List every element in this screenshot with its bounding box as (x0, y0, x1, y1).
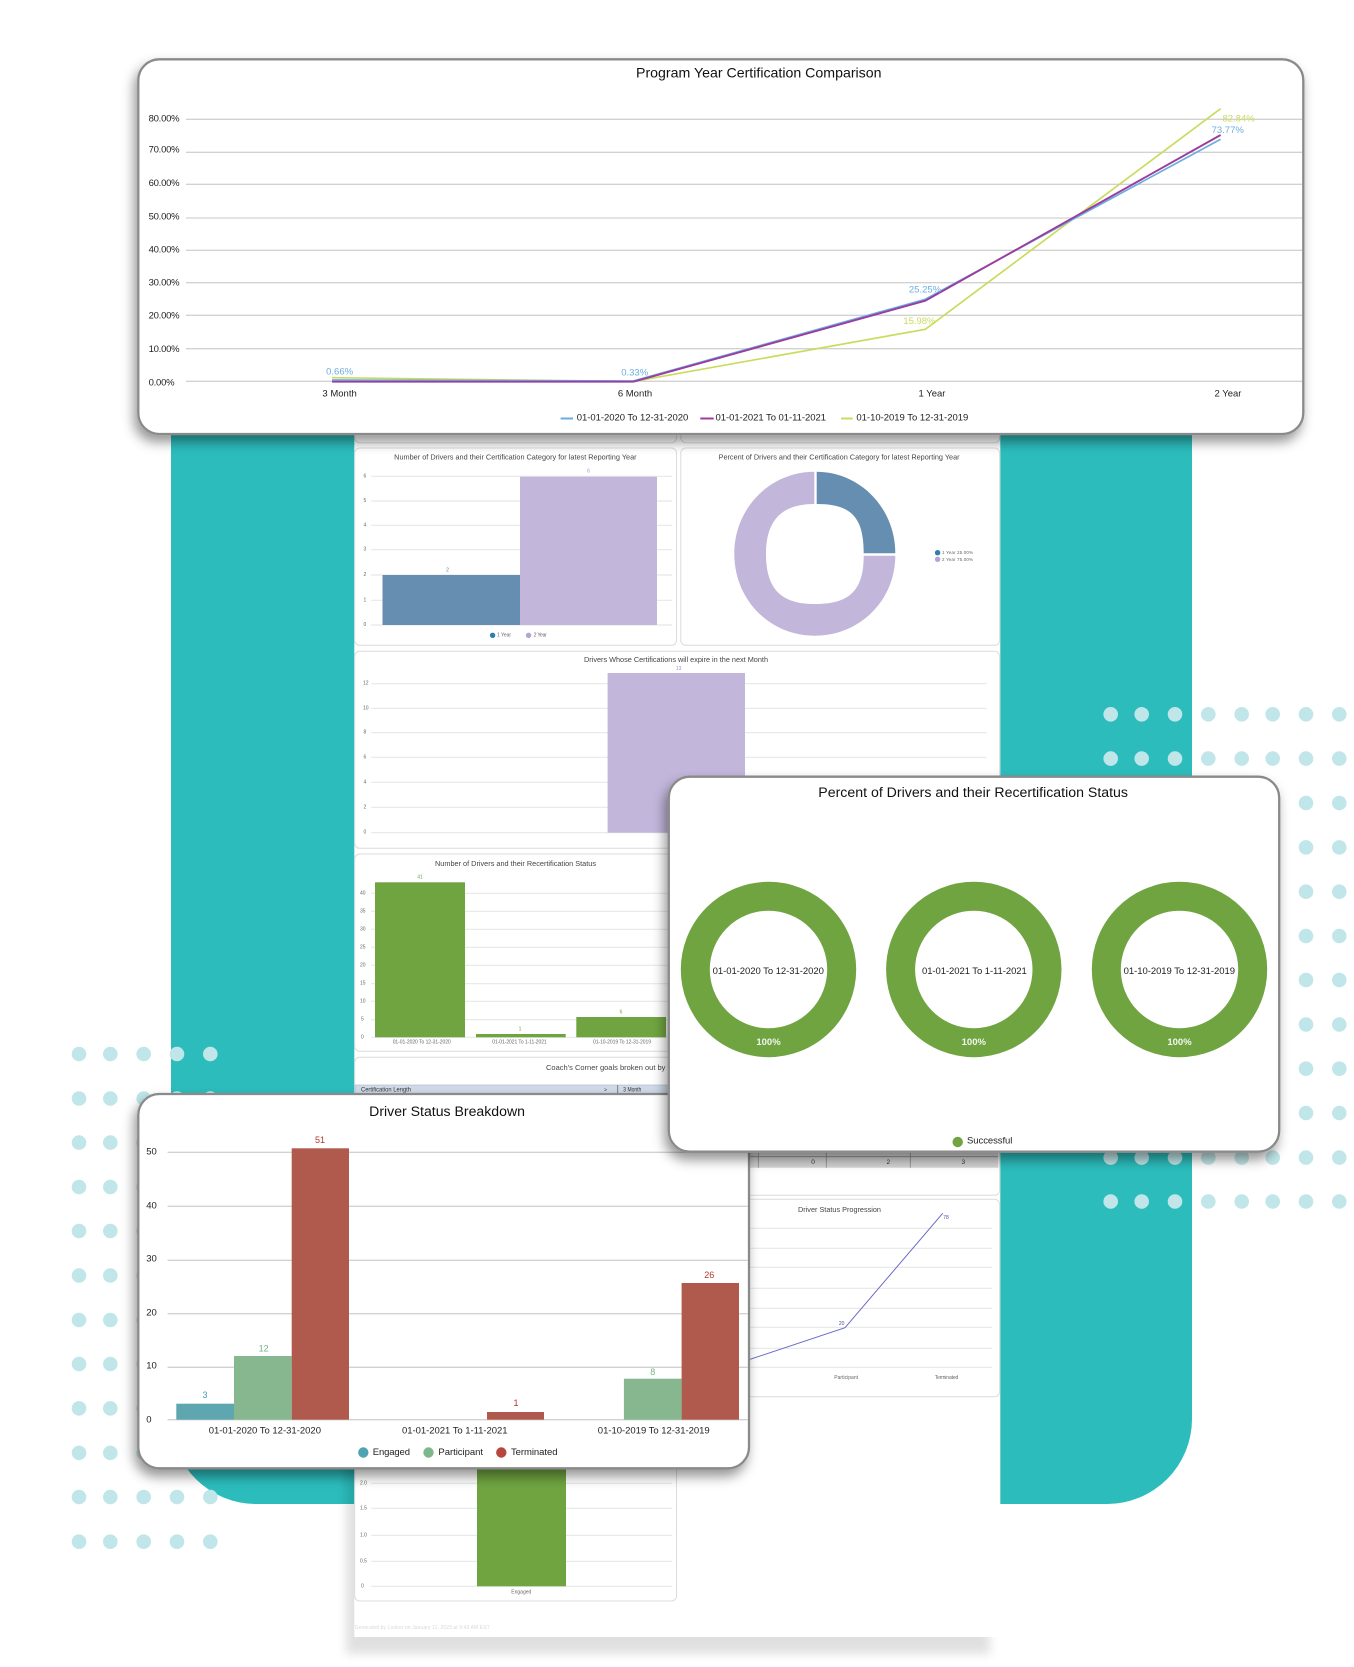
line chart (695, 1213, 992, 1381)
bar chart: 40 (360, 890, 366, 896)
bar chart: 4 (364, 779, 366, 785)
legend (561, 412, 968, 424)
card: number of drivers by certification category (355, 448, 676, 645)
data labels: 1 (513, 1398, 519, 1408)
card title: Drivers Whose Certifications will expire in the next Month (584, 657, 768, 664)
donut legend: 1 Year 25.00% (942, 550, 973, 555)
card title: Percent of Drivers and their Certification Category for latest Reporting Year (719, 454, 960, 462)
legend: 01-10-2019 To 12-31-2019 (856, 412, 968, 424)
dot grid: right (1103, 707, 1347, 1209)
bar chart: Engaged (511, 1589, 532, 1595)
bar chart: 13 (676, 666, 682, 672)
y axis labels: 60.00% (149, 178, 180, 189)
bar chart: 1 (364, 597, 366, 603)
bar chart: 0 (364, 830, 366, 836)
bar chart: 15 (360, 981, 366, 987)
bar chart: 01-10-2019 To 12-31-2019 (593, 1039, 651, 1045)
table header (355, 1085, 999, 1095)
data labels: 25.25% (909, 284, 942, 296)
legend: 01-01-2021 To 01-11-2021 (716, 412, 826, 424)
data labels: 0.66% (326, 366, 354, 378)
bar chart: 6 (587, 469, 590, 475)
bar chart: 8 (364, 730, 366, 736)
bar chart: 3 (364, 547, 366, 553)
card: number of drivers recertification status (355, 854, 1000, 1051)
card: percent of drivers by certification category (681, 448, 1000, 645)
y axis labels (146, 1146, 157, 1426)
card: certifications expiring next month (355, 651, 1000, 848)
bar chart (360, 875, 986, 1045)
table total row: 0 (811, 1159, 815, 1166)
y axis labels (149, 114, 180, 388)
donut: 2020: 01-01-2020 To 12-31-2020 (713, 966, 824, 977)
bar chart: 2 (364, 572, 366, 578)
legend: Engaged (373, 1447, 410, 1458)
card title: Driver Status Progression (798, 1207, 881, 1214)
bar chart (363, 666, 987, 836)
card title: Number of Drivers and their Recertification Status (435, 861, 597, 868)
x axis labels: 2 Year (1215, 388, 1241, 400)
bar chart: 0 (361, 1583, 364, 1589)
line chart: Participant (834, 1375, 859, 1381)
bar chart: 01-01-2020 To 12-31-2020 (393, 1039, 451, 1045)
data labels: 12 (259, 1344, 269, 1354)
x axis labels: 1 Year (919, 388, 945, 400)
y axis labels: 40.00% (149, 244, 180, 256)
bar chart (360, 1400, 672, 1595)
bar chart: 20 (360, 962, 366, 968)
donut legend (935, 550, 973, 562)
x axis labels (209, 1425, 710, 1436)
legend: Successful (967, 1136, 1012, 1146)
bar chart: 41 (417, 875, 423, 881)
card title: Number of Drivers and their Certification Category for latest Reporting Year (394, 454, 637, 462)
x axis labels: 3 Month (322, 388, 357, 400)
data labels: 15.98% (903, 316, 936, 327)
bar chart: 30 (360, 926, 366, 932)
y axis labels: 40 (146, 1200, 157, 1212)
line chart: Terminated (935, 1375, 959, 1381)
x axis labels: 6 Month (618, 388, 652, 400)
data labels: 26 (704, 1270, 714, 1280)
top cards, partly hidden (355, 380, 1000, 443)
table total row: 3 (961, 1159, 965, 1166)
bar chart: 4 (364, 522, 366, 528)
legend: Terminated (511, 1447, 558, 1458)
data labels: 0.33% (621, 368, 649, 378)
bar chart: 01-01-2021 To 1-11-2021 (492, 1039, 547, 1045)
footer note: Generated by Looker on January 11, 2023 at 9:43 AM EST (355, 1625, 490, 1631)
donut legend: 2 Year 75.00% (942, 557, 973, 562)
y axis labels: 70.00% (149, 144, 180, 156)
y axis labels: 10.00% (149, 344, 180, 355)
bar chart: 6 (364, 473, 366, 479)
legend: 2 Year (534, 632, 547, 638)
bar chart: 25 (360, 944, 366, 950)
data labels: 8 (650, 1367, 655, 1377)
legend: 01-01-2020 To 12-31-2020 (577, 412, 688, 424)
table total row: 2 (886, 1159, 890, 1166)
donut: 2021: 100% (962, 1037, 986, 1048)
table header: Certification Length (361, 1088, 411, 1094)
data labels (202, 1135, 714, 1408)
bar chart: 2 (364, 804, 366, 810)
y axis labels: 30.00% (149, 278, 180, 288)
y axis labels: 30 (146, 1254, 157, 1264)
bar chart: 0.5 (360, 1558, 367, 1564)
y axis labels: 80.00% (149, 114, 180, 124)
donut: 2021 (901, 896, 1047, 1048)
y axis labels: 20 (146, 1308, 157, 1318)
table total row (700, 1152, 998, 1168)
y axis labels: 50 (146, 1146, 157, 1158)
bar chart: 2 (446, 568, 449, 574)
bar chart: 1.5 (360, 1505, 367, 1511)
data labels: 3 (202, 1390, 208, 1400)
dot grid: left (72, 1047, 218, 1549)
bar chart (168, 1148, 748, 1420)
y axis labels: 0.00% (149, 378, 175, 388)
card: coach's corner goals table (355, 1057, 1000, 1195)
bar chart: 12 (363, 681, 369, 687)
title: Program Year Certification Comparison (636, 64, 882, 80)
donut: 2020: 100% (756, 1037, 781, 1048)
bar chart: 6 (620, 1010, 623, 1016)
bar chart: 1 (519, 1027, 522, 1033)
bar chart: 2.0 (360, 1480, 367, 1486)
panel: driver status breakdown (138, 1094, 749, 1468)
line chart: 78 (943, 1215, 949, 1221)
donut: 2019 (1106, 896, 1253, 1048)
donut: 2021: 01-01-2021 To 1-11-2021 (922, 966, 1027, 977)
y axis labels: 0 (146, 1414, 151, 1426)
y axis labels: 10 (146, 1360, 157, 1372)
data labels: 73.77% (1212, 125, 1244, 136)
x axis labels: 01-10-2019 To 12-31-2019 (598, 1425, 710, 1436)
data labels (326, 114, 1255, 378)
x axis labels (322, 388, 1241, 400)
table header: 3 Month (623, 1088, 641, 1094)
bar chart: 5 (361, 1017, 364, 1023)
table header: > (604, 1088, 607, 1094)
panel: program year certification comparison (138, 59, 1303, 434)
legend: 1 Year (497, 632, 511, 638)
legend (358, 1447, 558, 1458)
teal background shape (171, 100, 1192, 1504)
legend: Participant (438, 1447, 483, 1458)
report page shadow (346, 1400, 990, 1654)
y axis labels: 20.00% (149, 310, 180, 322)
y axis labels: 50.00% (149, 212, 180, 222)
card title: Coach's Corner goals broken out by Certification Length (546, 1063, 732, 1072)
line chart: 20 (839, 1321, 845, 1327)
line chart (186, 109, 1302, 382)
title: Percent of Drivers and their Recertification Status (818, 785, 1128, 800)
x axis labels: 01-01-2021 To 1-11-2021 (402, 1425, 508, 1436)
bar chart: 10 (363, 705, 369, 711)
legend (490, 632, 547, 638)
card: engaged bar chart (355, 1199, 676, 1601)
donut: 2020 (695, 896, 842, 1048)
panel: percent of drivers recertification status (669, 777, 1279, 1152)
bar chart: 5 (364, 498, 366, 504)
bar chart: 10 (360, 998, 366, 1004)
report page (354, 300, 1000, 1637)
donut chart (734, 472, 895, 636)
donut: 2019: 01-10-2019 To 12-31-2019 (1124, 966, 1235, 977)
x axis labels: 01-01-2020 To 12-31-2020 (209, 1425, 321, 1436)
bar chart: 35 (360, 908, 366, 914)
bar chart: 6 (364, 754, 366, 760)
bar chart: 0 (364, 622, 366, 628)
data labels: 82.84% (1222, 114, 1255, 124)
bar chart (364, 469, 672, 628)
donut: 2019: 100% (1167, 1037, 1192, 1048)
title: Driver Status Breakdown (369, 1104, 525, 1119)
data labels: 51 (315, 1135, 325, 1145)
bar chart: 0 (361, 1034, 364, 1040)
bar chart: 1.0 (360, 1532, 367, 1538)
card: driver status progression (681, 1199, 1000, 1397)
